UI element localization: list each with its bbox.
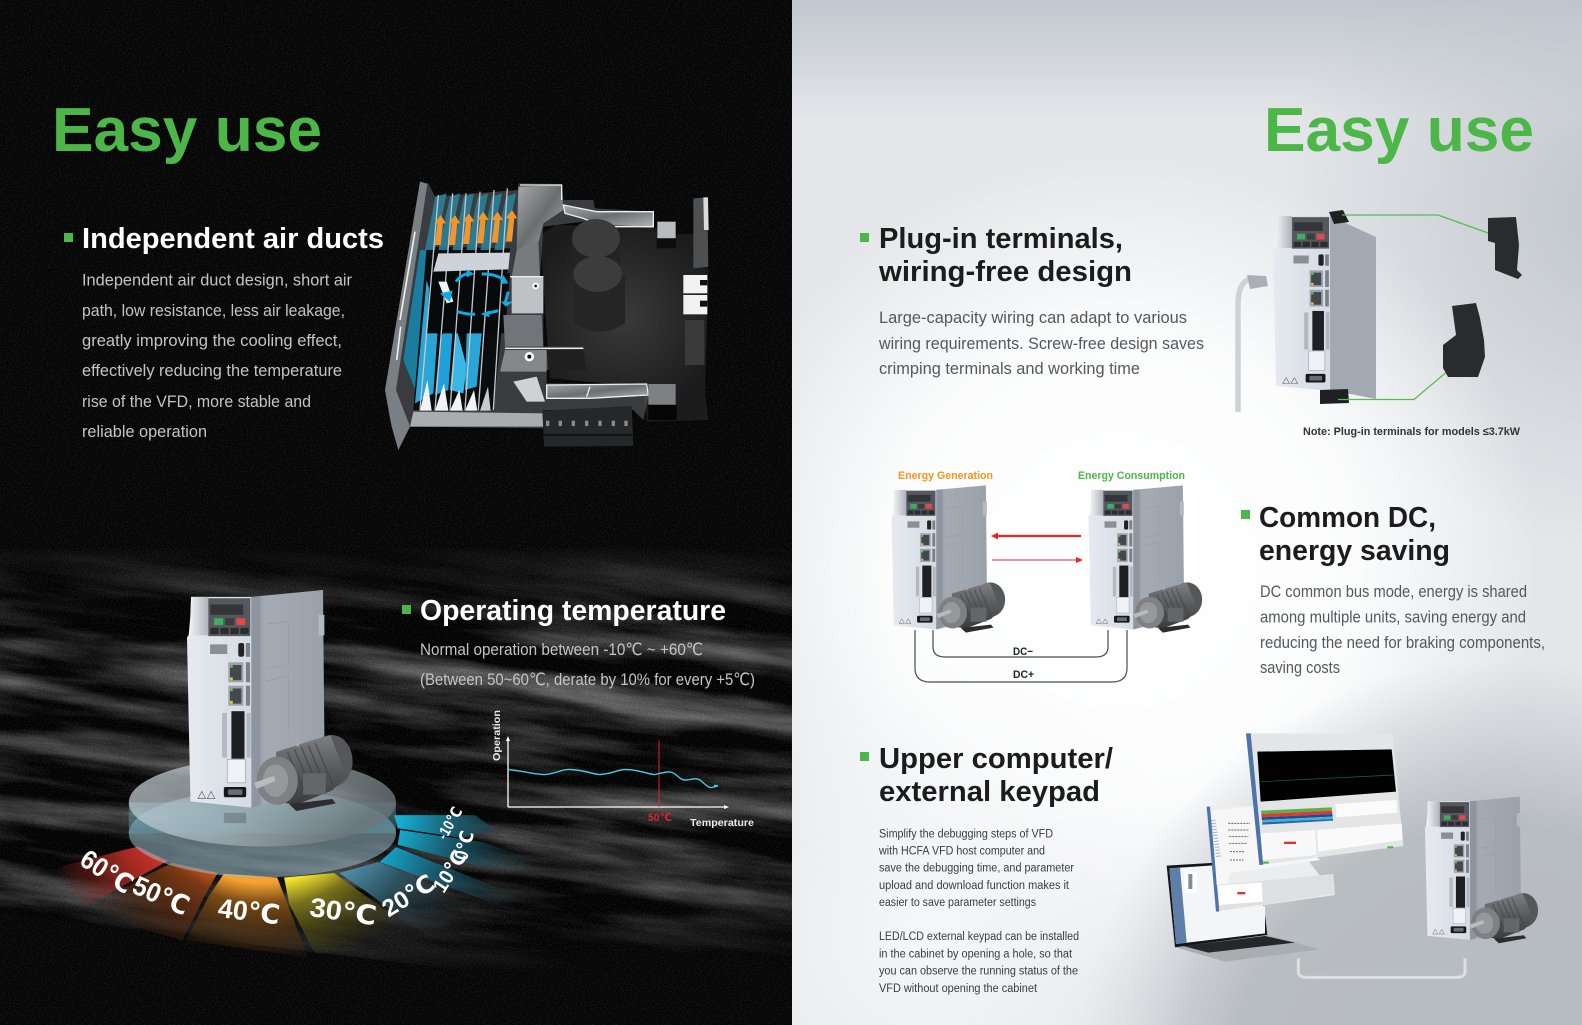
software window: back xyxy=(1207,805,1335,912)
drive: generation xyxy=(891,485,987,629)
section: common DC text: among multiple units, saving energy and xyxy=(1260,608,1526,626)
orange airflow arrows xyxy=(434,210,517,245)
blue airflow arrows xyxy=(443,273,508,314)
section: upper computer text: upload and download function makes it xyxy=(879,880,1070,892)
section: common DC text: energy saving xyxy=(1259,535,1450,567)
terminal: upper xyxy=(1488,217,1522,279)
panel: light background xyxy=(792,0,1582,1025)
motor: generation xyxy=(937,582,1005,633)
temperature labels: 50℃ xyxy=(128,870,194,921)
platform disc xyxy=(129,758,396,877)
section: common DC text: Common DC, xyxy=(1259,502,1436,534)
DC bus wires xyxy=(915,630,1127,682)
chart: operation vs temperature: Temperature xyxy=(690,817,754,829)
section: independent air ducts text xyxy=(64,223,384,441)
motor xyxy=(254,735,353,811)
note: Note: Plug-in terminals for models ≤3.7kW xyxy=(1303,426,1521,438)
terminal block xyxy=(542,406,633,447)
VFD drive xyxy=(1425,797,1521,940)
section: upper computer text: Simplify the debugging steps of VFD xyxy=(879,828,1053,840)
section: upper computer text: external keypad xyxy=(879,776,1100,808)
illustration: plug-in terminals xyxy=(1238,210,1522,438)
temperature labels: 20℃ xyxy=(377,870,440,923)
section: independent air ducts text: reliable operation xyxy=(82,422,207,441)
VFD drive xyxy=(187,590,324,808)
section: independent air ducts text: rise of the VFD, more stable and xyxy=(82,392,311,411)
section: independent air ducts text: greatly improving the cooling effect, xyxy=(82,331,342,350)
temperature labels: 0℃ xyxy=(451,829,479,863)
laptop xyxy=(1167,863,1320,962)
diagram: common DC energy flow: Energy Consumption xyxy=(1078,470,1185,482)
illustration: temperature dial with drive and motor xyxy=(36,590,540,957)
illustration: software, laptop, drive and keypad cable xyxy=(1167,733,1538,977)
section: upper computer text: you can observe the running status of the xyxy=(879,966,1078,978)
section: upper computer text: save the debugging time, and parameter xyxy=(879,862,1074,874)
temperature segments xyxy=(36,815,540,957)
section: upper computer text: VFD without opening the cabinet xyxy=(879,983,1038,995)
chart: operation vs temperature xyxy=(491,710,754,829)
section: plug-in terminals text: crimping terminals and working time xyxy=(879,359,1140,378)
section: upper computer text: in the cabinet by opening a hole, so that xyxy=(879,948,1073,960)
diagram: common DC energy flow: DC+ xyxy=(1013,669,1034,681)
section: independent air ducts text: path, low resistance, less air leakage, xyxy=(82,301,345,320)
section: plug-in terminals text: wiring-free design xyxy=(878,256,1132,288)
temperature labels: 40℃ xyxy=(216,893,282,930)
temperature labels xyxy=(75,804,479,931)
chart: operation vs temperature: Operation xyxy=(491,710,503,761)
terminal: lower xyxy=(1443,303,1485,377)
section: common DC text: DC common bus mode, energy is shared xyxy=(1260,582,1527,601)
bottom plug xyxy=(1320,389,1349,404)
reflection cable xyxy=(1298,958,1465,977)
diagram: common DC energy flow xyxy=(891,470,1202,682)
section: upper computer text xyxy=(860,743,1113,995)
section: plug-in terminals text: wiring requirements. Screw-free design saves xyxy=(878,334,1204,353)
section: operating temperature text: (Between 50~60℃, derate by 10% for every +5℃) xyxy=(420,670,755,689)
temperature labels: -10℃ xyxy=(434,804,466,843)
section: independent air ducts text: effectively reducing the temperature xyxy=(82,361,342,380)
section: common DC text: saving costs xyxy=(1260,658,1340,677)
top plug xyxy=(1329,210,1349,224)
right-side connectors xyxy=(648,197,709,420)
metal frame xyxy=(500,185,653,402)
diagram: common DC energy flow: DC− xyxy=(1013,646,1033,658)
section: operating temperature text: Normal operation between -10℃ ~ +60℃ xyxy=(420,640,703,659)
drive side face xyxy=(1330,216,1376,399)
title: Easy use (light side): Easy use xyxy=(1264,96,1534,165)
section: upper computer text: Upper computer/ xyxy=(879,743,1113,775)
section: upper computer text: LED/LCD external keypad can be installed xyxy=(879,931,1079,943)
section: independent air ducts text: Independent air ducts xyxy=(82,223,384,255)
section: upper computer text: easier to save parameter settings xyxy=(879,897,1036,909)
VFD drive front xyxy=(1273,216,1330,391)
diagram: common DC energy flow: Energy Generation xyxy=(898,470,993,482)
software window: front xyxy=(1246,733,1403,865)
section: operating temperature text xyxy=(402,595,755,689)
section: common DC text: reducing the need for braking components, xyxy=(1260,633,1545,652)
section: plug-in terminals text: Large-capacity wiring can adapt to various xyxy=(879,308,1187,327)
capacitors xyxy=(572,219,625,332)
title: Easy use (dark side): Easy use xyxy=(52,96,322,165)
section: common DC text xyxy=(1241,502,1545,677)
section: operating temperature text: Operating temperature xyxy=(420,595,726,627)
red arrows xyxy=(991,532,1083,563)
cable xyxy=(1238,279,1250,412)
drive reflection xyxy=(224,813,246,823)
chart: operation vs temperature: 50℃ xyxy=(648,812,672,824)
temperature labels: 10℃ xyxy=(428,847,472,897)
section: plug-in terminals text: Plug-in terminals, xyxy=(879,223,1123,255)
drive: consumption xyxy=(1088,485,1184,629)
section: independent air ducts text: Independent air duct design, short air xyxy=(82,270,352,290)
illustration: air duct cutaway xyxy=(385,182,709,450)
motor: consumption xyxy=(1134,582,1202,633)
section: plug-in terminals text xyxy=(860,223,1204,378)
panel: dark background xyxy=(0,0,792,1025)
temperature labels: 30℃ xyxy=(308,892,379,931)
section: upper computer text: with HCFA VFD host computer and xyxy=(878,846,1045,858)
temperature labels: 60℃ xyxy=(75,844,139,900)
motor xyxy=(1469,893,1538,943)
